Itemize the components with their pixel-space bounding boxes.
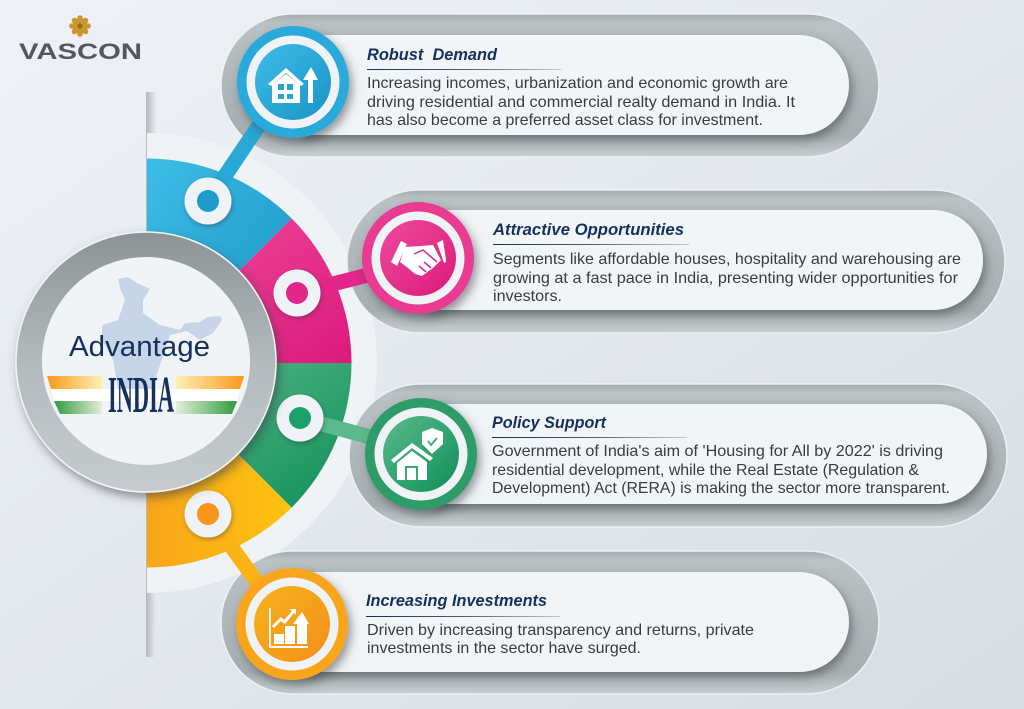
heading: Increasing Investments — [366, 591, 547, 610]
map of India — [102, 277, 222, 389]
panel: Robust Demand — [184, 26, 849, 224]
icon: house with up arrow — [268, 67, 318, 103]
heading rule — [367, 69, 561, 70]
segment: blue — [147, 158, 292, 363]
heading: Attractive Opportunities — [492, 220, 684, 239]
body text: Driven by increasing transparency and returns, private — [367, 622, 754, 639]
body text: growing at a fast pace in India, presenting wider opportunities for — [493, 270, 959, 287]
panel: Attractive Opportunities — [274, 202, 983, 316]
segment: green — [147, 363, 352, 508]
body text — [493, 251, 961, 305]
connector — [297, 272, 380, 293]
node — [184, 490, 232, 538]
body text: Government of India's aim of 'Housing for All by 2022' is driving — [492, 443, 943, 460]
white disc — [42, 257, 250, 465]
tricolour ribbons — [47, 376, 244, 414]
body text: investments in the sector have surged. — [367, 640, 641, 657]
heading: Robust Demand — [367, 45, 498, 64]
body text — [367, 622, 754, 657]
connector — [208, 112, 268, 201]
icon badge — [365, 398, 477, 510]
body text: Development) Act (RERA) is making the sector more transparent. — [492, 480, 950, 497]
icon: handshake — [391, 240, 446, 276]
connector — [208, 514, 266, 595]
white arc ring — [147, 133, 377, 593]
heading: Advantage: Advantage — [69, 331, 210, 363]
icon badge — [237, 26, 349, 138]
center badge: INDIA — [108, 367, 174, 424]
node — [274, 270, 320, 316]
icon badge — [362, 202, 474, 314]
heading: Policy Support — [492, 413, 607, 432]
heading rule — [366, 616, 560, 617]
icon: house with shield — [391, 428, 443, 480]
icon: gold gear — [69, 15, 91, 37]
segment: pink — [147, 218, 352, 363]
icon badge — [236, 568, 348, 680]
node — [276, 394, 324, 442]
text bar — [300, 572, 849, 672]
icon: rising bar chart — [269, 608, 309, 648]
gray ring — [16, 232, 276, 492]
text bar — [428, 404, 987, 504]
panel: Increasing Investments — [184, 490, 849, 680]
body text: has also become a preferred asset class for investment. — [367, 112, 763, 129]
body text: Increasing incomes, urbanization and economic growth are — [367, 75, 788, 92]
text bar — [300, 35, 849, 135]
body text: residential development, while the Real Estate (Regulation & — [492, 462, 919, 479]
heading rule — [493, 244, 689, 245]
panel: Policy Support — [276, 394, 987, 510]
center badge — [16, 232, 276, 492]
connector — [300, 418, 385, 441]
heading rule — [492, 437, 687, 438]
body text: driving residential and commercial realty demand in India. It — [367, 94, 796, 111]
body text — [367, 75, 796, 129]
text bar — [425, 210, 983, 310]
segment wheel — [147, 158, 352, 568]
panel backs — [221, 14, 1007, 694]
vertical bar — [146, 92, 156, 657]
body text: investors. — [493, 288, 562, 305]
wordmark: VASCON — [19, 39, 142, 64]
node — [184, 178, 232, 224]
body text: Segments like affordable houses, hospitality and warehousing are — [493, 251, 961, 268]
logo — [19, 15, 142, 64]
segment: yellow — [147, 363, 292, 568]
body text — [492, 443, 950, 497]
